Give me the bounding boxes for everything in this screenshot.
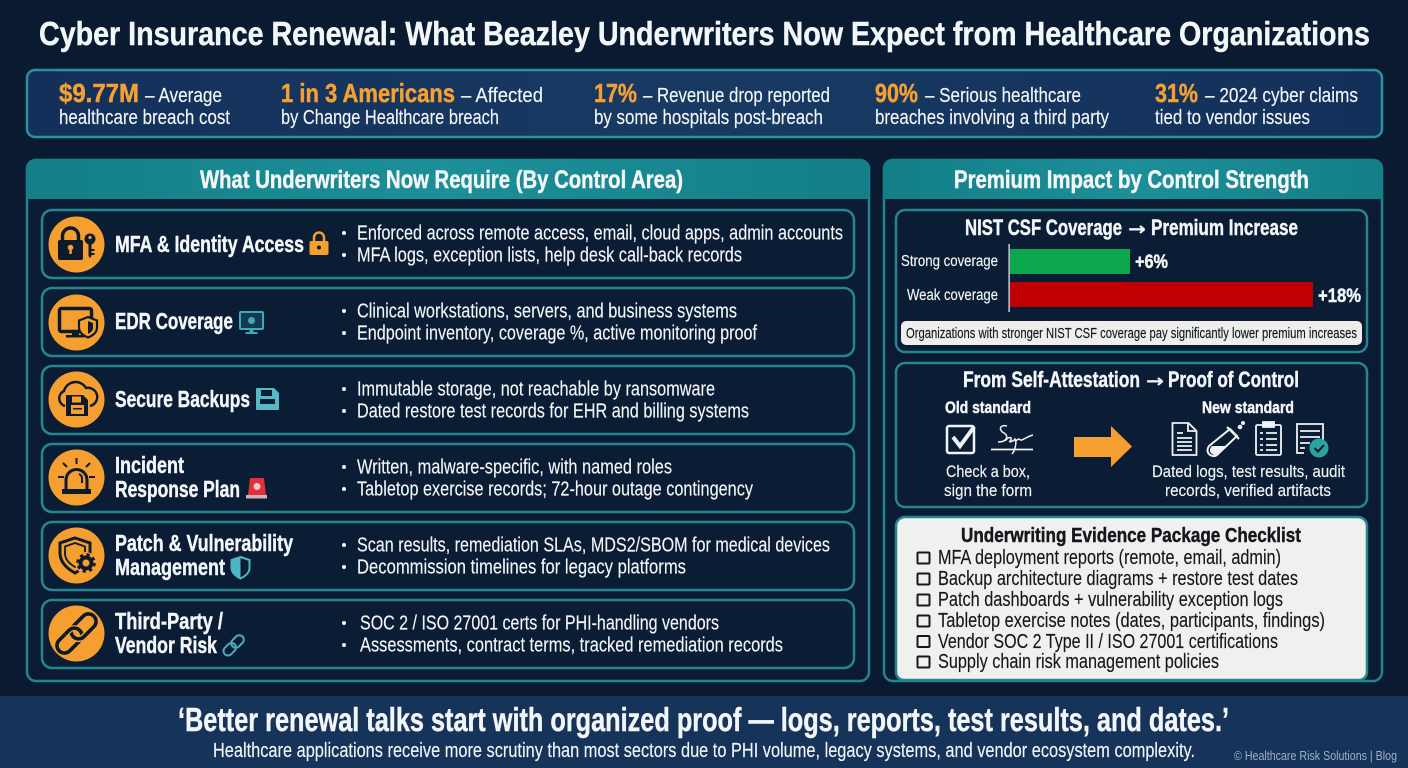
- label: [115, 608, 223, 658]
- stat: third party: breaches involving a third party: [875, 107, 1109, 129]
- label: Incident: [115, 452, 184, 478]
- requirements: Assessments, contract terms, tracked remediation records: [360, 634, 783, 656]
- row: backups: [42, 366, 854, 434]
- stat: revenue drop: [594, 78, 830, 129]
- stat: revenue drop: 17%: [594, 78, 637, 108]
- requirements: Scan results, remediation SLAs, MDS2/SBOM for medical devices: [357, 534, 830, 556]
- icon: shield and gear: [48, 528, 104, 584]
- icon: lock and key: [48, 216, 104, 272]
- heading: Premium Impact by Control Strength: [954, 166, 1309, 194]
- checklist items: [938, 547, 1325, 673]
- subtext: Healthcare applications receive more scrutiny than most sectors due to PHI volume, legacy systems, and vendor ecosystem complexity.: [213, 740, 1195, 762]
- requirements: [342, 378, 749, 422]
- icon: teal link: [222, 633, 246, 657]
- row: third party: [42, 600, 854, 668]
- chart title: [965, 215, 1298, 240]
- heading: From Self-Attestation: [963, 367, 1140, 392]
- panel: self-attestation to proof: [896, 363, 1367, 507]
- label: MFA & Identity Access: [115, 231, 304, 257]
- row: MFA: [42, 210, 854, 278]
- new standard: New standard: [1202, 398, 1294, 417]
- stat: breach cost: $9.77M: [59, 78, 139, 108]
- requirements: [342, 300, 757, 344]
- stat: Americans affected: [281, 78, 543, 129]
- checklist items: Backup architecture diagrams + restore test dates: [938, 568, 1298, 590]
- bar chart: NIST coverage: [896, 210, 1367, 352]
- panel: evidence checklist: [896, 517, 1367, 680]
- value labels: +18%: [1318, 286, 1361, 307]
- stat: revenue drop: by some hospitals post-breach: [594, 107, 823, 129]
- heading: →: [1146, 371, 1164, 392]
- axis labels: [901, 253, 998, 304]
- stat: third party: [875, 78, 1109, 129]
- value labels: [1135, 252, 1361, 307]
- old standard: sign the form: [944, 481, 1032, 500]
- stat: third party: – Serious healthcare: [925, 85, 1081, 107]
- row: EDR: [42, 288, 854, 356]
- icon: red siren: [246, 478, 267, 498]
- requirements: Enforced across remote access, email, cloud apps, admin accounts: [357, 222, 843, 244]
- old standard: Old standard: [945, 398, 1031, 417]
- checkboxes: [918, 552, 930, 668]
- old standard: Check a box,: [946, 462, 1030, 481]
- icon: chain link: [48, 606, 104, 662]
- requirements: [342, 612, 783, 656]
- icon: checkbox: [947, 426, 974, 453]
- stats banner: [27, 70, 1382, 137]
- new standard: records, verified artifacts: [1165, 481, 1331, 500]
- requirements: [342, 222, 843, 266]
- requirements: SOC 2 / ISO 27001 certs for PHI-handling vendors: [360, 612, 719, 634]
- new standard: Dated logs, test results, audit: [1152, 462, 1345, 481]
- icon: teal monitor: [240, 312, 263, 334]
- icon: cloud and floppy: [48, 372, 104, 428]
- stat: Americans affected: – Affected: [461, 85, 543, 107]
- icon: document: [1172, 423, 1196, 455]
- icon: alarm beacon: [48, 450, 104, 506]
- chart title: Premium Increase: [1151, 215, 1298, 240]
- icon: signature: [991, 426, 1033, 454]
- axis labels: Weak coverage: [907, 287, 998, 304]
- stat: cyber claims: [1155, 78, 1358, 129]
- stat: breach cost: – Average: [145, 85, 222, 107]
- stat: cyber claims: – 2024 cyber claims: [1205, 85, 1358, 107]
- bar: weak coverage: [1010, 282, 1313, 307]
- label: Secure Backups: [115, 386, 250, 412]
- stat: third party: 90%: [875, 78, 918, 108]
- old standard: [944, 398, 1033, 500]
- stat: cyber claims: tied to vendor issues: [1155, 107, 1310, 129]
- callout: [901, 321, 1362, 345]
- icon: monitor and shield: [48, 294, 104, 350]
- arrow: [1074, 426, 1132, 467]
- label: Third-Party /: [115, 608, 223, 634]
- icon: verified report: [1297, 424, 1328, 458]
- label: EDR Coverage: [115, 308, 233, 334]
- row: incident response: [42, 444, 854, 512]
- stat: breach cost: healthcare breach cost: [59, 107, 230, 129]
- heading: Proof of Control: [1168, 367, 1299, 392]
- icon: clipboard: [1256, 422, 1281, 455]
- requirements: Immutable storage, not reachable by ransomware: [357, 378, 715, 400]
- stat: Americans affected: by Change Healthcare breach: [281, 107, 499, 129]
- stat: cyber claims: 31%: [1155, 78, 1198, 108]
- requirements: Dated restore test records for EHR and billing systems: [357, 400, 749, 422]
- requirements: Clinical workstations, servers, and business systems: [357, 300, 737, 322]
- row: patch: [42, 522, 854, 590]
- new standard: [1152, 398, 1345, 500]
- requirements: MFA logs, exception lists, help desk call-back records: [357, 244, 742, 266]
- heading: [963, 367, 1299, 392]
- stat: breach cost: [59, 78, 230, 129]
- checklist items: MFA deployment reports (remote, email, admin): [938, 547, 1281, 569]
- requirements: Decommission timelines for legacy platforms: [357, 556, 686, 578]
- icon: teal shield: [232, 557, 250, 578]
- heading: Underwriting Evidence Package Checklist: [961, 524, 1301, 547]
- label: Vendor Risk: [115, 632, 217, 658]
- requirements: Tabletop exercise records; 72-hour outage contingency: [357, 478, 753, 500]
- chart title: →: [1128, 219, 1146, 240]
- requirements: Written, malware-specific, with named roles: [357, 456, 672, 478]
- icon: padlock: [310, 232, 328, 255]
- checklist items: Vendor SOC 2 Type II / ISO 27001 certifications: [938, 631, 1278, 653]
- checklist items: Tabletop exercise notes (dates, participants, findings): [938, 610, 1325, 632]
- bar: strong coverage: [1010, 249, 1130, 274]
- axis labels: Strong coverage: [901, 253, 998, 270]
- label: Patch & Vulnerability: [115, 530, 293, 556]
- label: Management: [115, 554, 225, 580]
- requirements: [342, 456, 753, 500]
- checklist items: Patch dashboards + vulnerability exception logs: [938, 589, 1283, 611]
- stat: Americans affected: 1 in 3 Americans: [281, 78, 455, 108]
- requirements: [342, 534, 830, 578]
- heading: What Underwriters Now Require (By Control Area): [200, 166, 683, 194]
- value labels: +6%: [1135, 252, 1168, 273]
- panel: premium impact: [883, 159, 1383, 681]
- stat: revenue drop: – Revenue drop reported: [643, 85, 830, 107]
- label: [115, 452, 240, 502]
- label: [115, 530, 293, 580]
- icon: test tube: [1208, 422, 1244, 456]
- icon: teal floppy: [256, 388, 279, 410]
- checklist items: Supply chain risk management policies: [938, 651, 1219, 673]
- footer banner: [0, 696, 1408, 768]
- label: Response Plan: [115, 476, 240, 502]
- panel: what underwriters require: [26, 159, 869, 681]
- requirements: Endpoint inventory, coverage %, active monitoring proof: [357, 322, 757, 344]
- chart title: NIST CSF Coverage: [965, 215, 1122, 240]
